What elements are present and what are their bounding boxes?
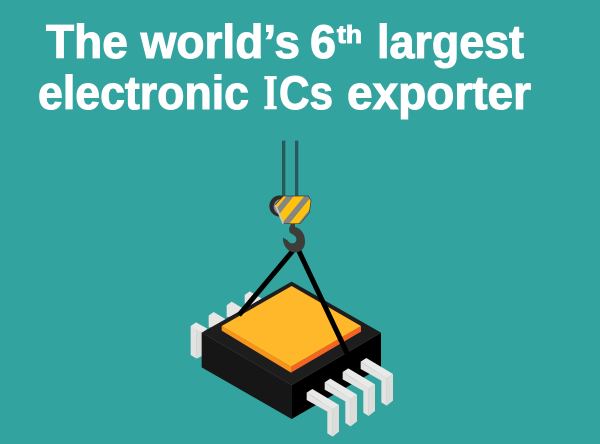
title: exporter: [347, 66, 531, 119]
title: 6: [310, 15, 336, 68]
lifting ropes: [239, 247, 347, 353]
title: th: [337, 21, 362, 49]
gold lid: [222, 286, 361, 373]
title: Cs: [279, 66, 333, 119]
pulley wheel: [269, 195, 291, 217]
title: The world’s: [46, 15, 300, 68]
front right pins: [307, 358, 393, 437]
cables: [282, 141, 298, 197]
title: [38, 15, 531, 120]
title: electronic: [38, 66, 249, 119]
icon: integrated circuit chip: [191, 282, 393, 437]
hook: [283, 224, 305, 252]
rear left pins: [191, 291, 261, 359]
icon: crane cables and hook block: [269, 140, 312, 252]
title: largest: [377, 15, 524, 68]
title: I: [263, 67, 278, 120]
chip body: [202, 282, 381, 419]
striped hook block: [274, 196, 312, 224]
